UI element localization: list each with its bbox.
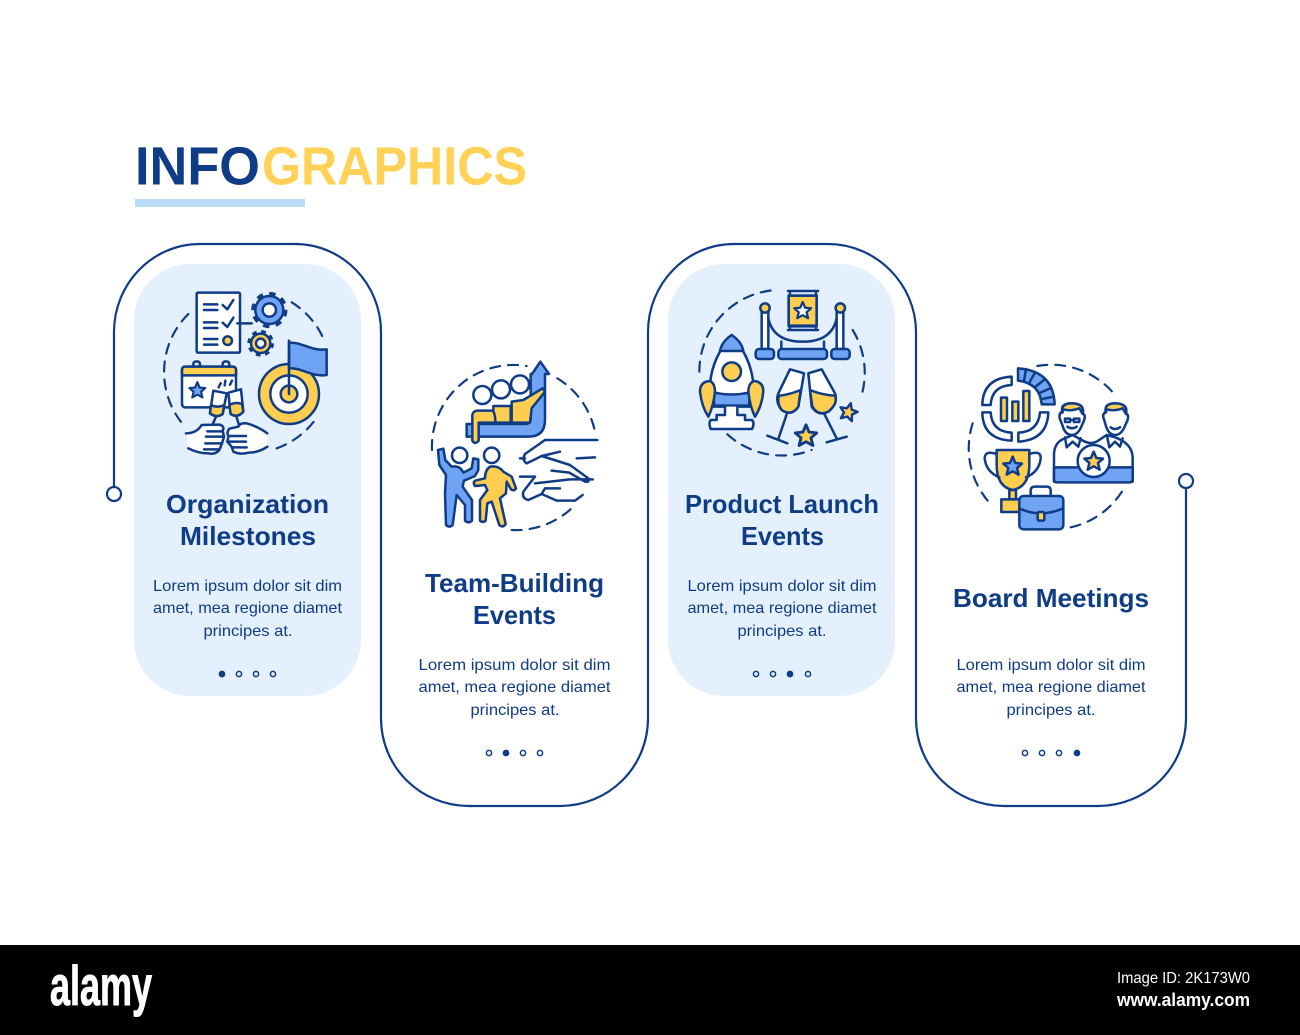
text block: product launch events: Lorem ipsum dolor sit dim <box>688 578 876 595</box>
panel: background for organization milestones <box>134 264 361 696</box>
heading: team-building events: Team-Building <box>425 568 604 598</box>
title underline <box>135 199 305 207</box>
text block: product launch events <box>688 578 877 640</box>
pagination dots: step 2 <box>486 750 543 756</box>
heading: product launch events <box>685 489 879 551</box>
pagination dots: step 4 <box>1022 750 1080 756</box>
panel: background for product launch events <box>668 264 895 696</box>
text block: team-building events <box>418 657 611 719</box>
footer bar <box>0 945 1300 1035</box>
text block: team-building events: amet, mea regione diamet <box>418 679 611 696</box>
footer bar: Image ID: 2K173W0 <box>1117 970 1250 987</box>
text block: organization milestones: amet, mea regione diamet <box>153 600 343 617</box>
heading: board meetings: Board Meetings <box>953 583 1149 613</box>
pagination dots: step 1 <box>219 671 276 677</box>
text block: board meetings: Lorem ipsum dolor sit dim <box>956 657 1146 674</box>
text block: board meetings <box>956 657 1146 719</box>
heading: team-building events: Events <box>473 600 556 630</box>
heading: organization milestones: Milestones <box>180 521 316 551</box>
text block: product launch events: principes at. <box>738 623 826 640</box>
footer bar: www.alamy.com <box>1116 990 1250 1010</box>
heading: product launch events: Product Launch <box>685 489 879 519</box>
text block: organization milestones: principes at. <box>204 623 292 640</box>
title: INFO <box>135 136 260 196</box>
heading: product launch events: Events <box>741 521 824 551</box>
text block: team-building events: Lorem ipsum dolor sit dim <box>418 657 610 674</box>
connecting outline of all four steps <box>107 244 1193 806</box>
heading: organization milestones <box>166 489 329 551</box>
title: GRAPHICS <box>262 136 527 196</box>
text block: team-building events: principes at. <box>470 702 560 719</box>
text block: board meetings: amet, mea regione diamet <box>956 679 1146 696</box>
title <box>135 136 527 196</box>
heading: team-building events <box>425 568 604 630</box>
icon: product launch events <box>699 290 865 456</box>
icon: board meetings <box>969 365 1133 529</box>
pagination dots: step 3 <box>753 671 811 677</box>
text block: organization milestones <box>153 578 343 640</box>
text block: board meetings: principes at. <box>1006 702 1096 719</box>
text block: organization milestones: Lorem ipsum dolor sit dim <box>153 578 342 595</box>
footer bar: alamy <box>50 954 152 1017</box>
heading: organization milestones: Organization <box>166 489 329 519</box>
icon: organization milestones <box>164 293 327 454</box>
icon: team-building events <box>432 362 597 530</box>
text block: product launch events: amet, mea regione diamet <box>688 600 877 617</box>
